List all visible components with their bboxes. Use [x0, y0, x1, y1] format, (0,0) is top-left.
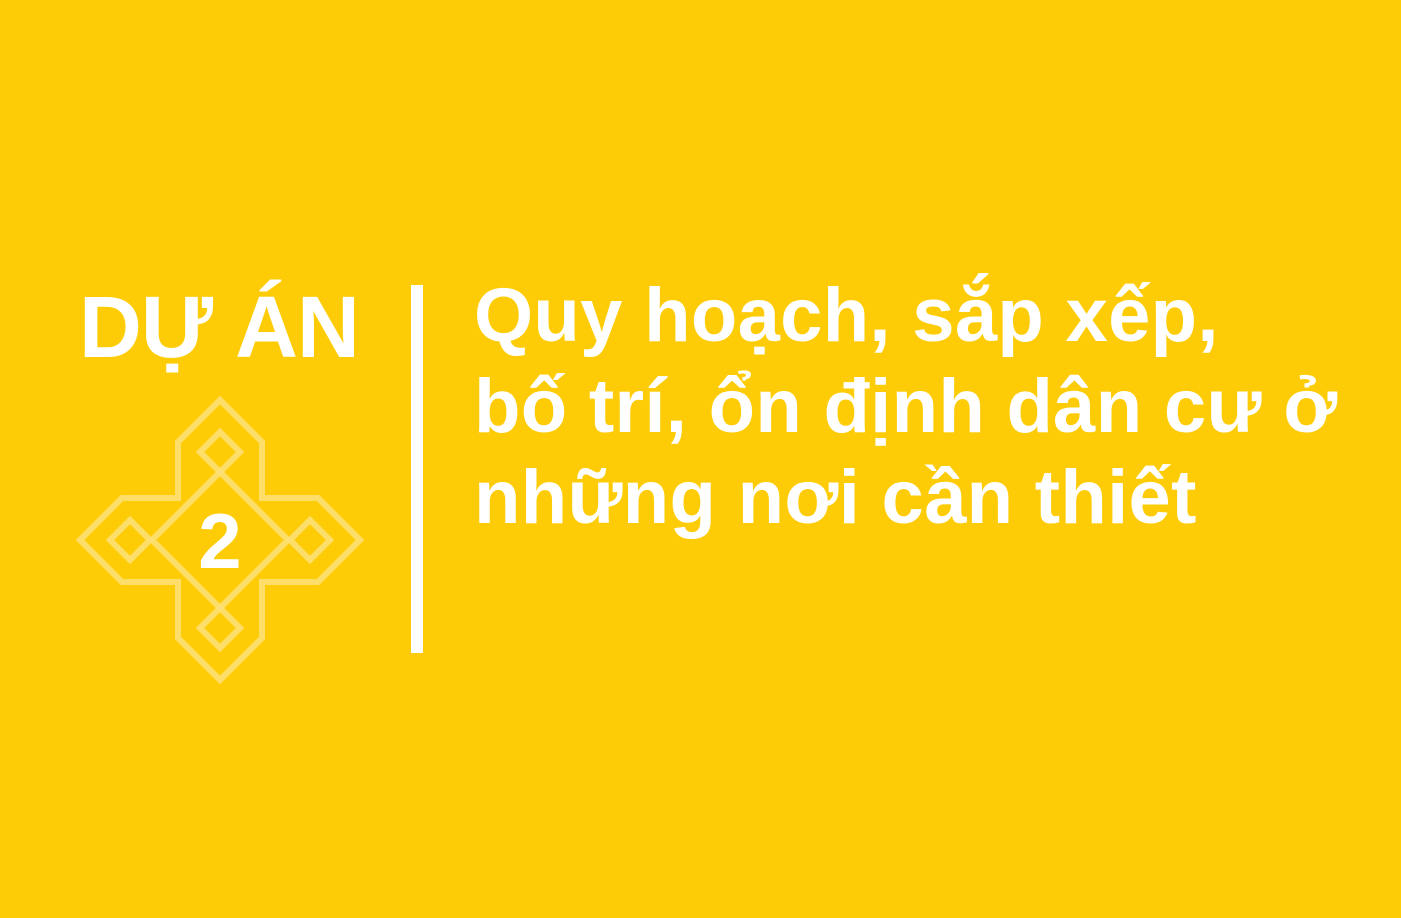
title text: những nơi cần thiết: [474, 455, 1197, 540]
icon: emblem with number 2: 2: [198, 497, 242, 585]
title text: Quy hoạch, sắp xếp,: [474, 273, 1219, 358]
divider bar: [411, 285, 423, 653]
heading: DỰ ÁN: DỰ ÁN: [79, 279, 359, 376]
title text: [474, 273, 1338, 540]
title text: bố trí, ổn định dân cư ở: [474, 364, 1338, 449]
